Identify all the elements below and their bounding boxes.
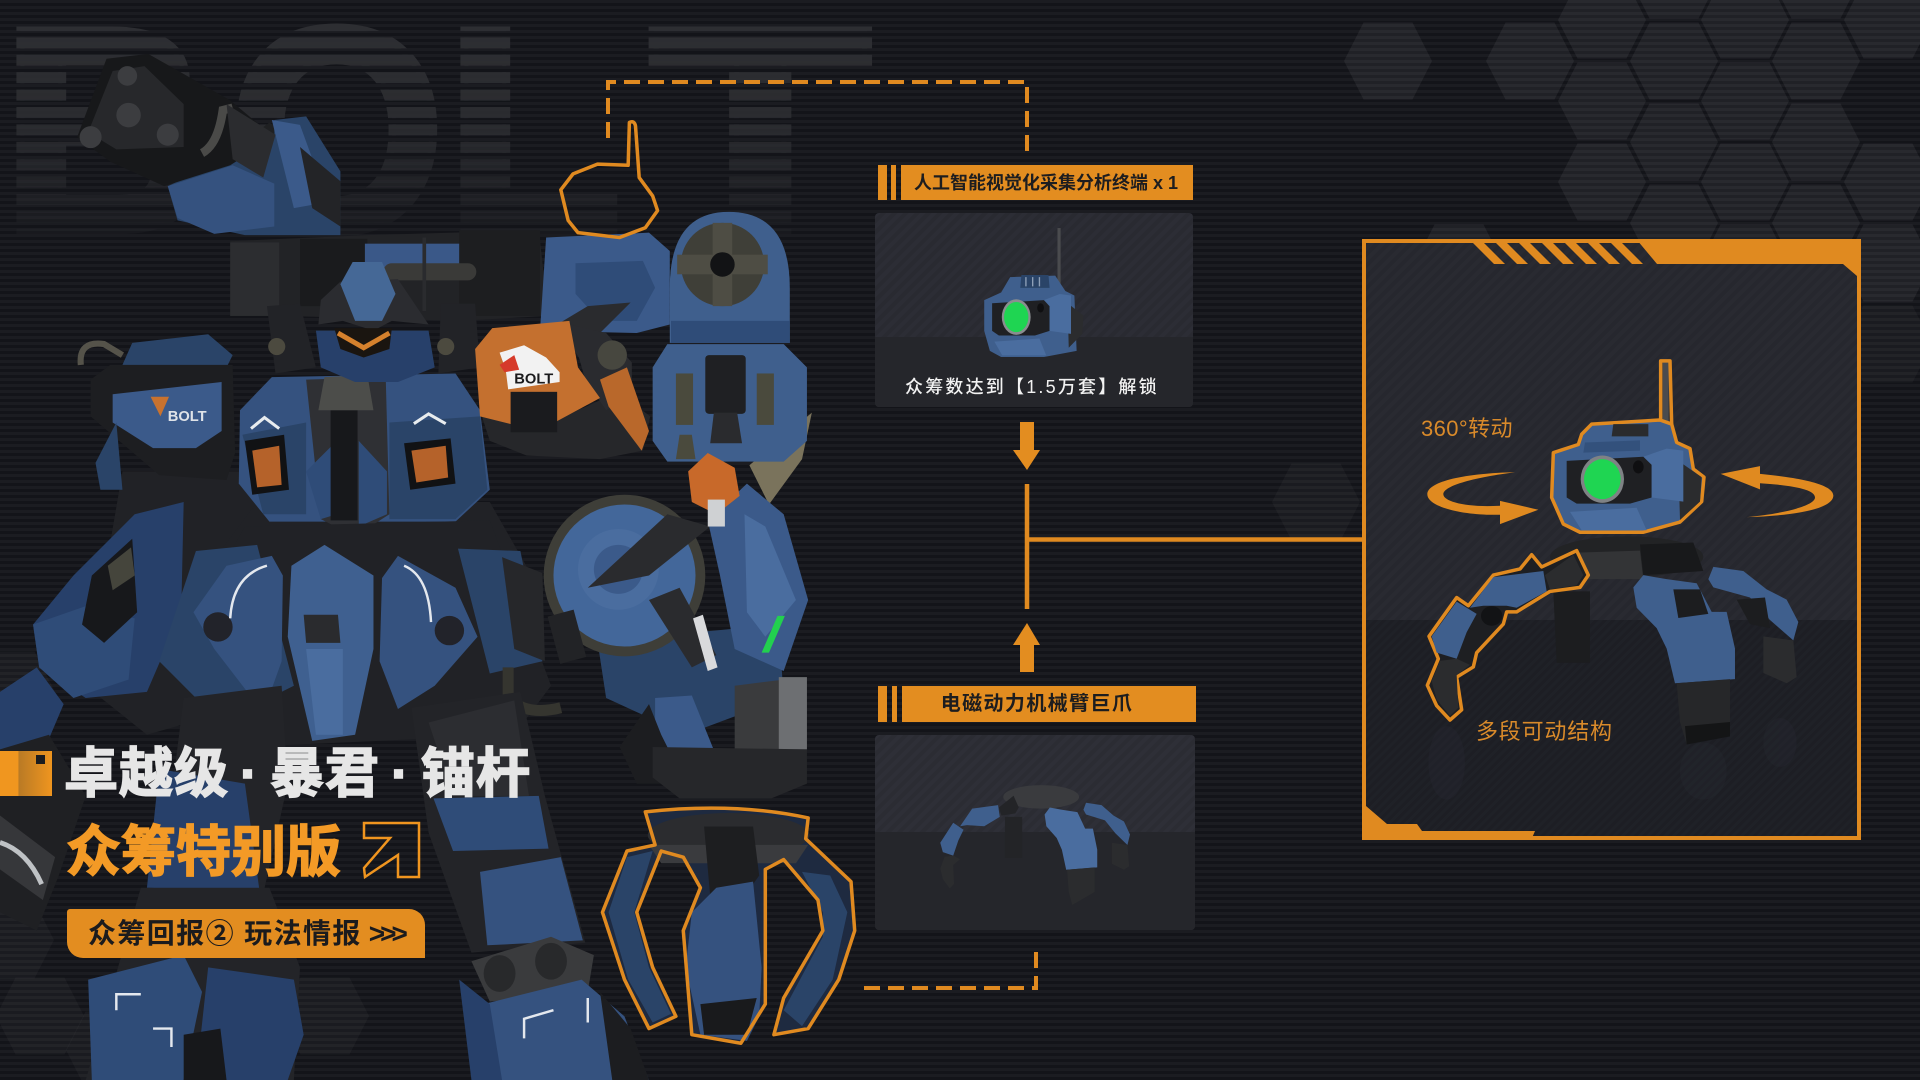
header: AI terminal: 人工智能视觉化采集分析终端 x 1: [914, 173, 1178, 193]
bottom dashed connector: [864, 952, 1036, 988]
claw icon: [940, 785, 1130, 905]
title square icon: [0, 751, 52, 796]
backpack beam and shoulder cylinder: [230, 212, 790, 343]
card: claw arm: [875, 735, 1195, 930]
right leg: [1708, 567, 1798, 683]
right arm, shield and hand: [544, 453, 808, 798]
back lower block and blade: [653, 344, 812, 504]
head: [267, 238, 480, 382]
front leg: [1633, 575, 1735, 744]
junction lines: [1027, 484, 1364, 609]
rotate arrows: [1427, 466, 1833, 524]
right leg: [411, 692, 649, 1080]
title line one: 卓越级·暴君·锚杆: [64, 744, 531, 804]
title line two: 众筹特别版: [66, 821, 341, 883]
terminal head icon: [984, 228, 1083, 357]
waist skirts: [159, 520, 561, 747]
label: multi-segment: 多段可动结构: [1476, 719, 1613, 744]
outlined left leg: [1427, 551, 1588, 720]
header: claw arm: 电磁动力机械臂巨爪: [941, 693, 1133, 715]
anchor claw outlined: [602, 808, 855, 1043]
hub base: [1550, 536, 1703, 579]
down arrow: [1013, 422, 1040, 470]
left leg: [86, 686, 304, 1080]
robot turret and legs: [1427, 361, 1833, 800]
subtitle button: [67, 909, 425, 958]
background word BOLT: [16, 24, 872, 204]
raised arm and gun: [77, 54, 340, 235]
subtitle button: 众筹回报② 玩法情报>>>: [88, 918, 403, 949]
left shoulder pad: [81, 334, 235, 490]
logo sticker: [500, 345, 560, 389]
logo sticker: BOLT: [514, 371, 553, 387]
card: AI terminal unlock: [875, 213, 1193, 407]
torso and chest: [220, 373, 539, 612]
panel background: [1364, 241, 1859, 838]
top dashed connector: [608, 82, 1027, 152]
orange shoulder with logo: [475, 302, 650, 459]
header: claw arm: [878, 686, 1196, 722]
left shoulder pad: BOLT: [168, 409, 207, 425]
claw outline: [602, 808, 855, 1043]
turret head: [1552, 361, 1704, 532]
left arm and hand: [0, 471, 282, 931]
label: 360 rotation: 360°转动: [1421, 416, 1513, 441]
fist outline above arm: [561, 122, 658, 238]
panel frame decoration: [1362, 239, 1861, 840]
unlock caption: 众筹数达到【1.5万套】解锁: [905, 377, 1159, 397]
header: AI terminal: [878, 165, 1193, 200]
back leg: [1553, 591, 1590, 663]
reflections: [1428, 718, 1797, 800]
up arrow: [1013, 623, 1040, 672]
